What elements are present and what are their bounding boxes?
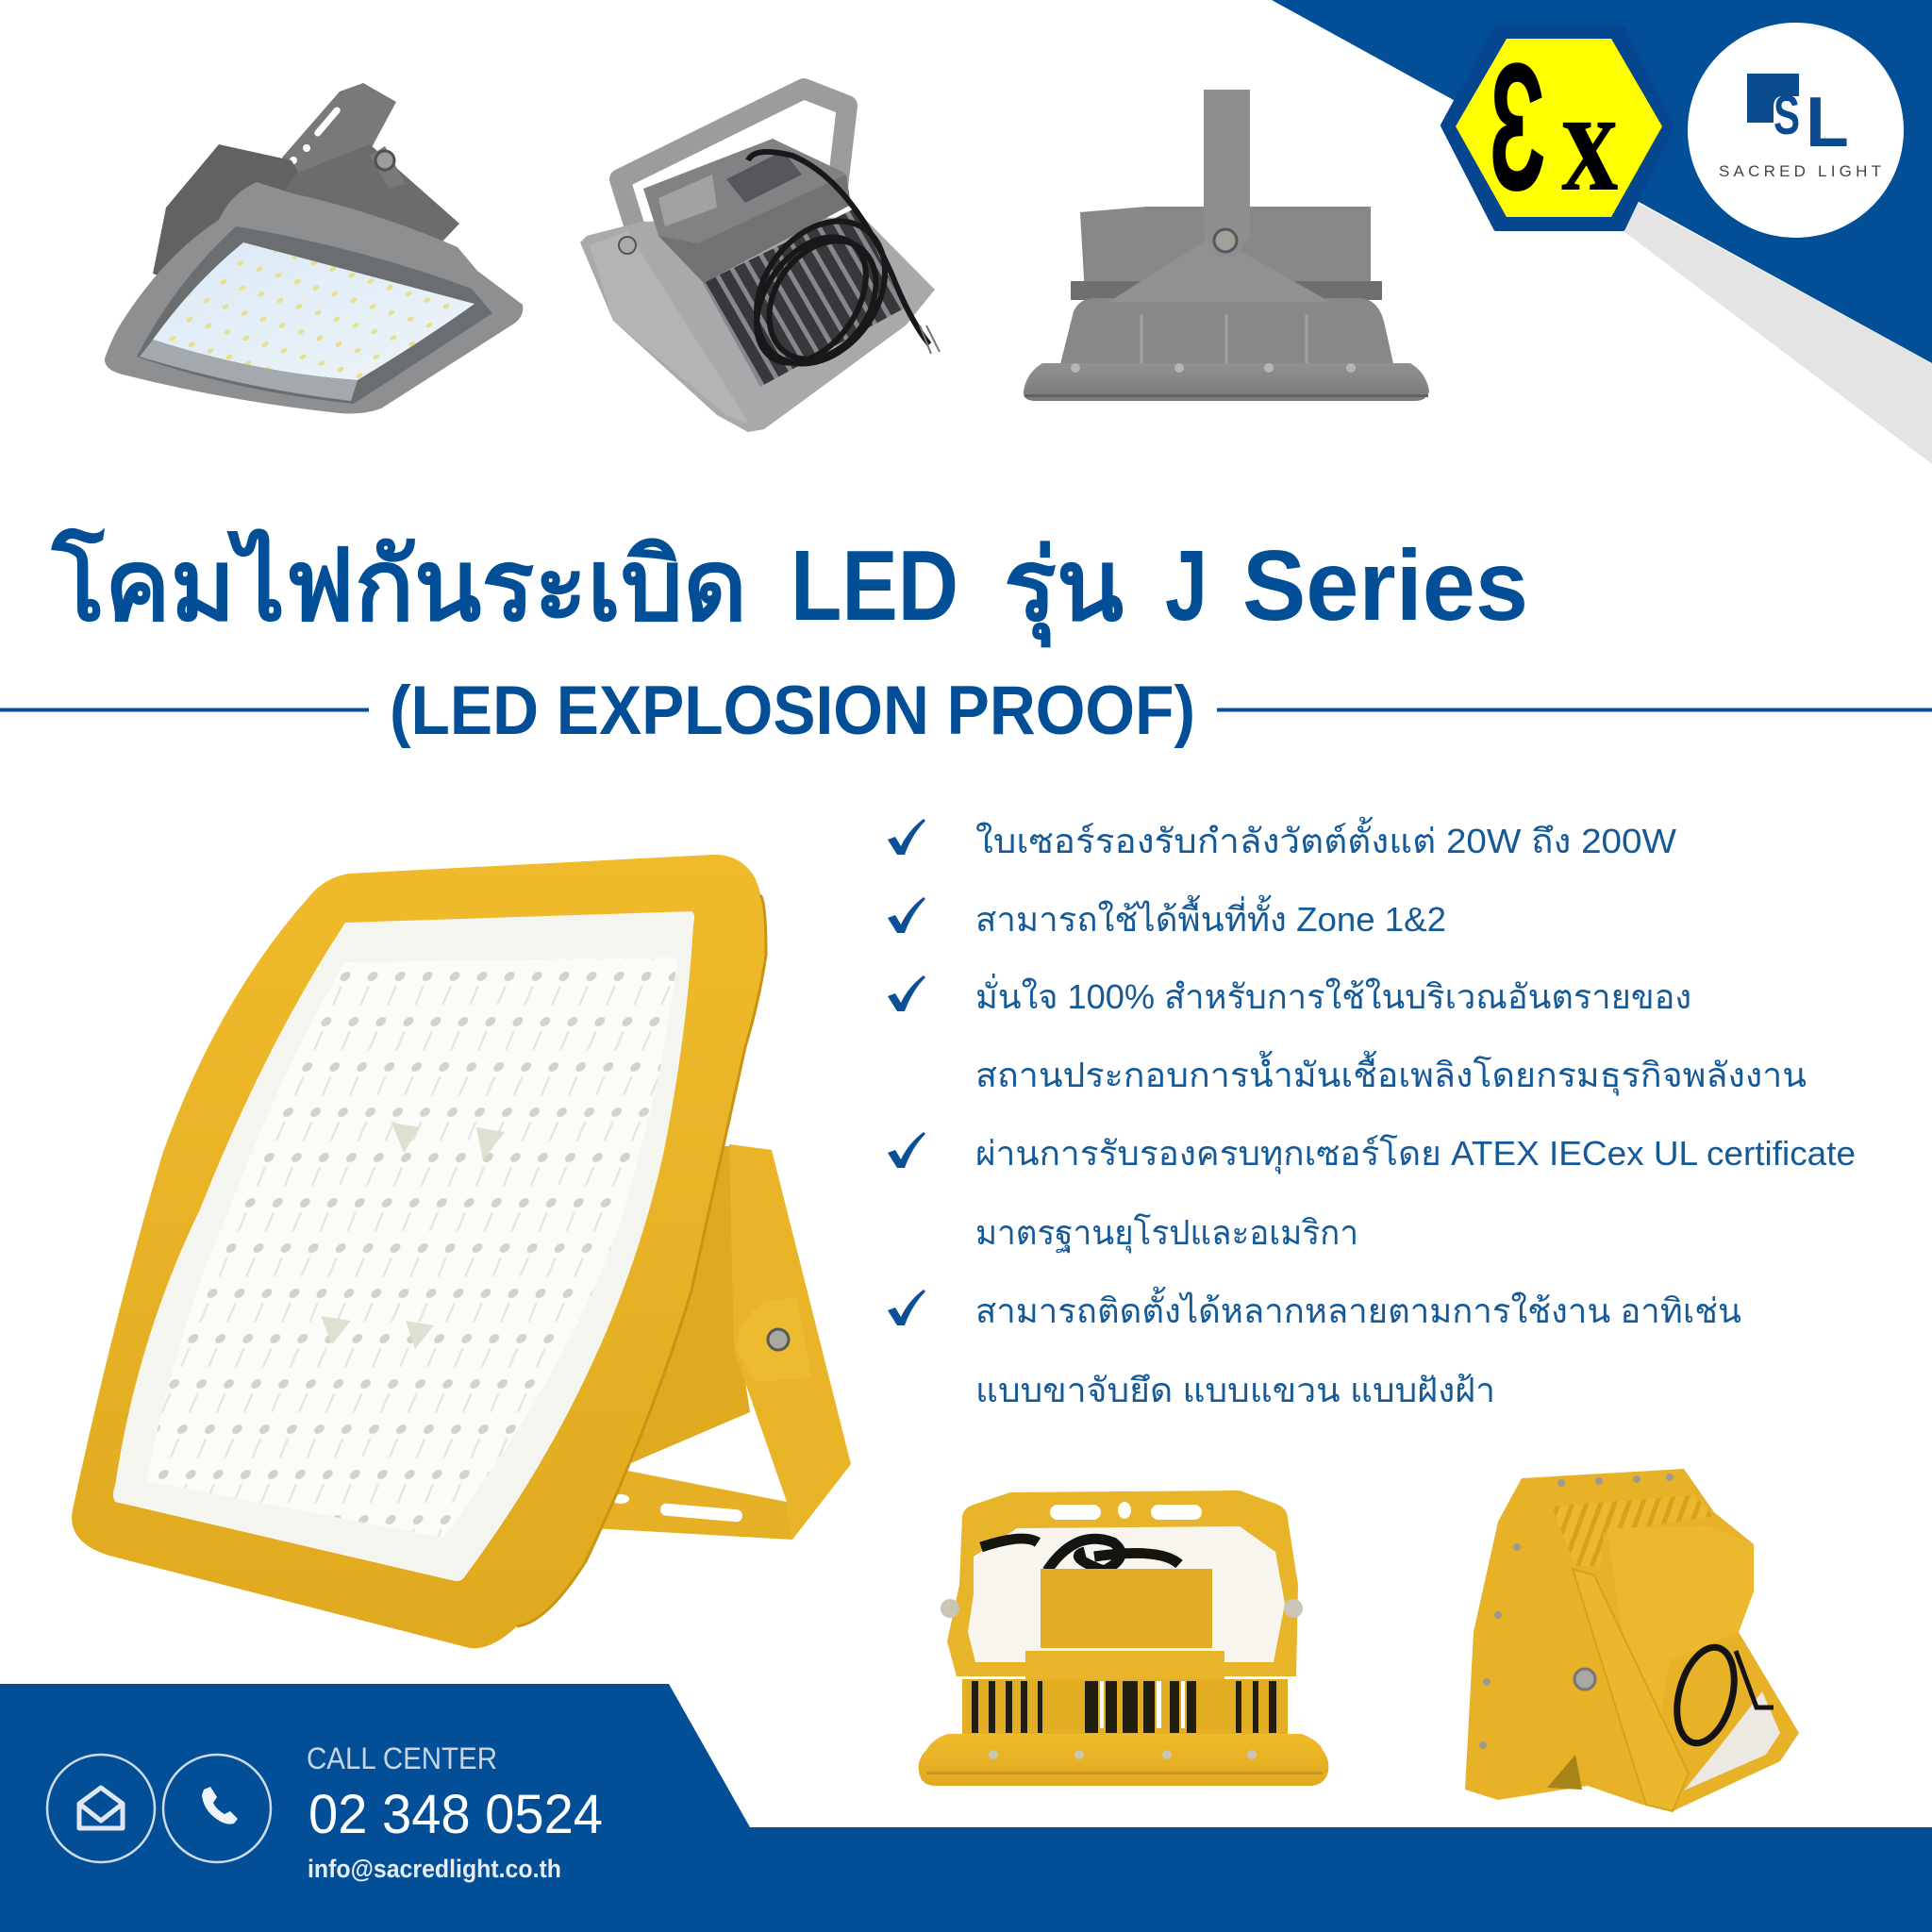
bullet 5: สามารถติดตั้งได้หลากหลายตามการใช้งาน อาทิเช่น [975,1286,1741,1330]
icon: ATEX Ex hexagon [1443,26,1672,229]
title: J [1165,530,1208,641]
bullet 4: มาตรฐานยุโรปและอเมริกา [975,1213,1358,1254]
subtitle with rules [0,673,1932,749]
product photo: yellow fixture rear [919,1491,1328,1786]
title [51,527,1528,648]
title: โคมไฟกันระเบิด [51,527,747,641]
bullet 3: มั่นใจ 100% สำหรับการใช้ในบริเวณอันตรายของ [975,974,1691,1016]
icon: ATEX Ex hexagon: x [1561,60,1618,223]
product photo: yellow fixture side [1465,1469,1799,1811]
title: LED [791,530,958,641]
product photo: grey fixture back [580,72,940,432]
top-right blue banner [1272,0,1932,363]
bullet 3: สถานประกอบการน้ำมันเชื้อเพลิงโดยกรมธุรกิจพลังงาน [975,1050,1807,1096]
email: info@sacredlight.co.th [308,1855,561,1883]
footer contact panel [0,1684,1932,1932]
logo: Sacred Light: S [1774,85,1800,146]
icon: phone [163,1755,271,1862]
bullet list [888,816,1856,1409]
bullet 4: ผ่านการรับรองครบทุกเซอร์โดย ATEX IECex UL certificate [975,1134,1856,1174]
icon: mail [47,1755,155,1862]
bullet 5: แบบขาจับยึด แบบแขวน แบบฝังฝ้า [975,1371,1495,1409]
grey diagonal band [1620,201,1932,464]
bullet 2: สามารถใช้ได้พื้นที่ทั้ง Zone 1&2 [975,894,1446,939]
icon: ATEX Ex hexagon: Ɛ [1489,26,1545,229]
title: Series [1242,530,1528,641]
bullet 5 [888,1286,1741,1409]
footer shape [0,1684,1932,1932]
bullet 4 [888,1132,1856,1254]
product photo: grey fixture front [105,83,523,413]
bullet 3 [888,974,1807,1096]
call center text: CALL CENTER [307,1741,497,1775]
phone number: 02 348 0524 [308,1784,603,1845]
logo: Sacred Light [1688,23,1904,238]
main product: yellow LED floodlight [72,855,851,1648]
logo: Sacred Light: L [1806,82,1849,161]
bullet 1: ใบเซอร์รองรับกำลังวัตต์ตั้งแต่ 20W ถึง 200W [975,816,1676,860]
title: รุ่น [1004,530,1124,648]
product photo: grey fixture side [1024,90,1429,401]
logo: Sacred Light: SACRED LIGHT [1719,162,1881,180]
subtitle with rules: (LED EXPLOSION PROOF) [390,673,1195,749]
